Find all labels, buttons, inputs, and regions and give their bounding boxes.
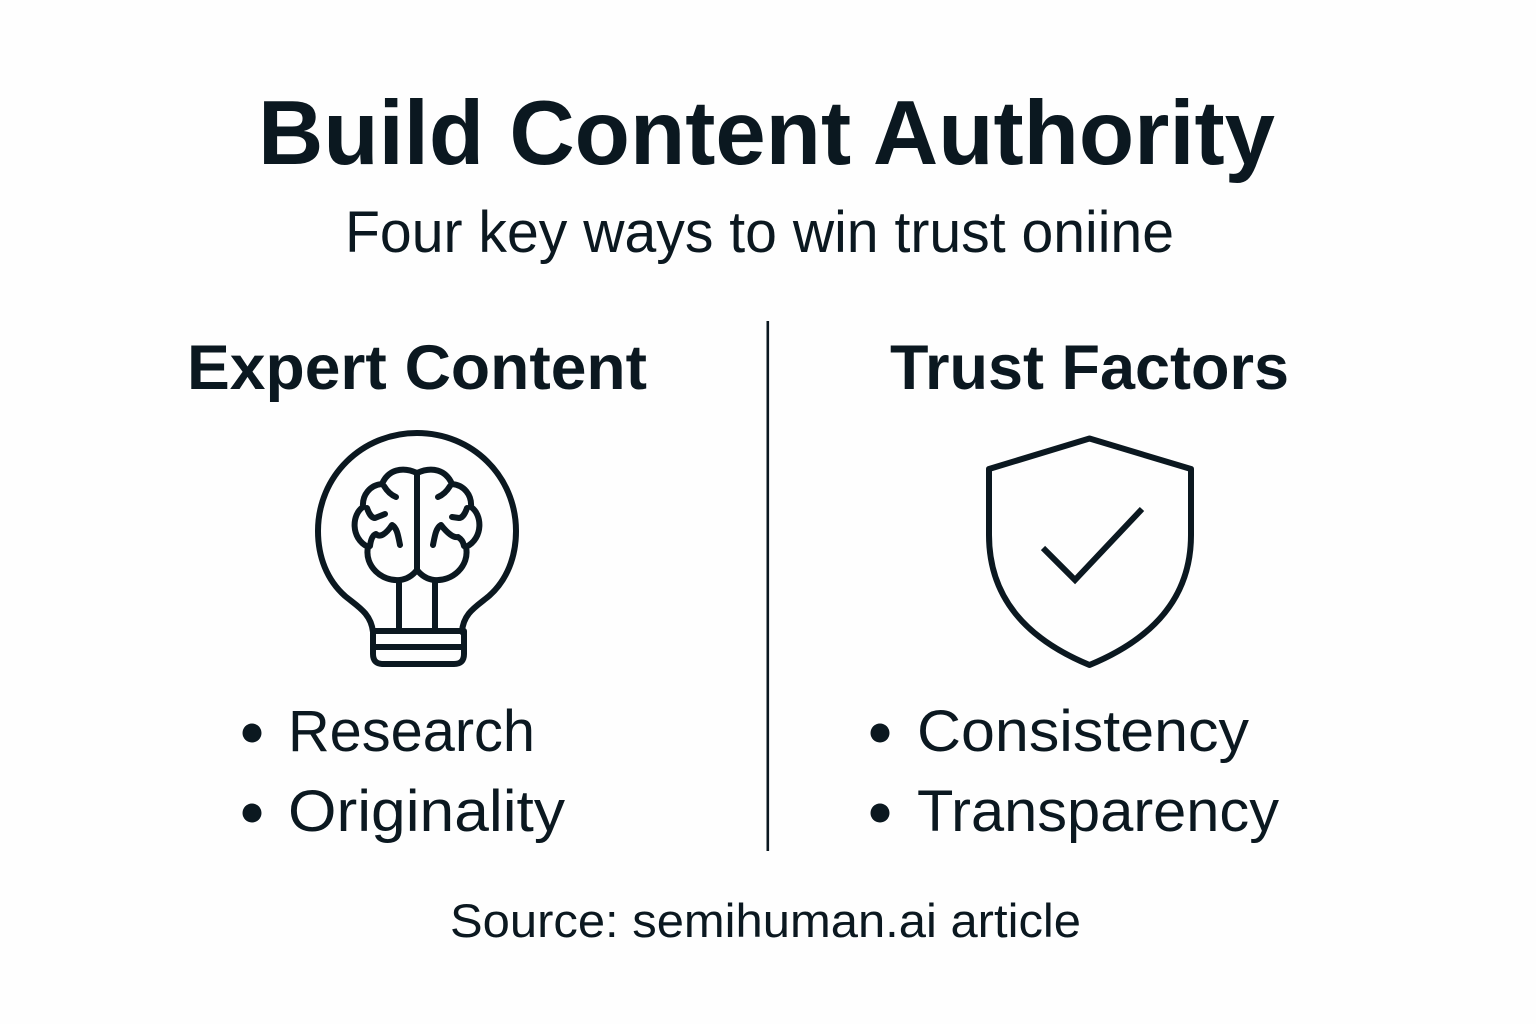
- bullet list: research, originality: Originality: [288, 779, 565, 844]
- subtitle: Four key ways to win trust oniine: [345, 200, 1174, 265]
- heading: expert content: Expert Content: [187, 333, 647, 403]
- icon: shield with check mark: [989, 438, 1191, 665]
- title: Build Content Authority: [258, 83, 1275, 184]
- vertical divider: [766, 321, 769, 851]
- bullet list: consistency, transparency: Consistency: [917, 699, 1249, 764]
- source line: Source: semihuman.ai article: [450, 894, 1081, 947]
- bullet list: research, originality: [242, 699, 565, 844]
- bullet list: consistency, transparency: Transparency: [917, 779, 1279, 844]
- icon: light bulb with brain: [318, 433, 516, 664]
- heading: trust factors: Trust Factors: [890, 333, 1289, 403]
- bullet list: research, originality: Research: [288, 699, 535, 764]
- bullet list: consistency, transparency: [870, 699, 1279, 844]
- panel: expert content: [187, 333, 647, 844]
- panel: trust factors: [870, 333, 1289, 844]
